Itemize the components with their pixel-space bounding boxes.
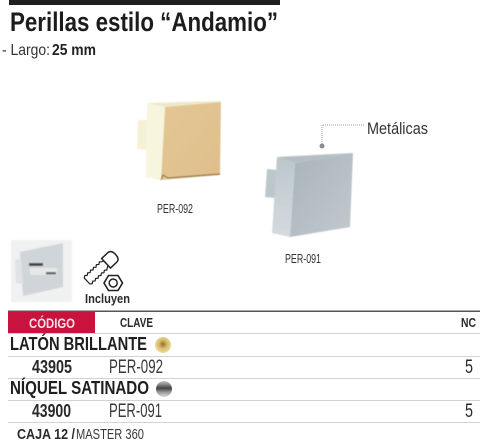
- callout: Metálicas: [320, 120, 428, 148]
- product: brass knob PER-092: [137, 101, 221, 180]
- product: nickel knob PER-091: [265, 153, 353, 237]
- subtitle: length: - Largo:: [2, 42, 50, 59]
- label: Incluyen: Incluyen: [85, 291, 130, 306]
- row heading: Níquel satinado: NÍQUEL SATINADO: [10, 377, 149, 398]
- row: 43905: [32, 357, 473, 378]
- top bar: [9, 0, 280, 5]
- table: [8, 310, 480, 443]
- subtitle: length: 25 mm: [52, 42, 96, 59]
- footer: box quantities: CAJA 12 /: [17, 427, 75, 443]
- table header: NC: [461, 315, 476, 330]
- screw: [83, 250, 120, 286]
- title: Perillas estilo “Andamio”: [10, 7, 278, 37]
- row: 43900: [32, 401, 473, 422]
- row: 43905: 43905: [32, 357, 72, 377]
- footer: box quantities: [17, 427, 144, 443]
- callout: Metálicas: Metálicas: [367, 120, 428, 138]
- table header: CLAVE: [120, 315, 153, 330]
- footer: box quantities: MASTER 360: [76, 427, 144, 443]
- table header: [8, 310, 480, 333]
- table header: CÓDIGO: [29, 314, 75, 331]
- row: 43900: 43900: [32, 401, 71, 421]
- icon: screw and nut: [83, 250, 122, 290]
- label: PER-091: PER-091: [285, 252, 321, 266]
- row: 43905: 5: [465, 357, 473, 378]
- label: PER-092: PER-092: [157, 202, 193, 216]
- row: 43905: PER-092: [109, 357, 163, 378]
- row: 43900: 5: [465, 401, 473, 422]
- subtitle: length: [2, 42, 96, 59]
- icon: nickel finish: [156, 381, 172, 397]
- package photo: [11, 240, 72, 302]
- row: 43900: PER-091: [109, 401, 162, 422]
- icon: brass finish: [155, 337, 171, 353]
- nut: [104, 276, 122, 290]
- row heading: Latón brillante: LATÓN BRILLANTE: [10, 333, 147, 354]
